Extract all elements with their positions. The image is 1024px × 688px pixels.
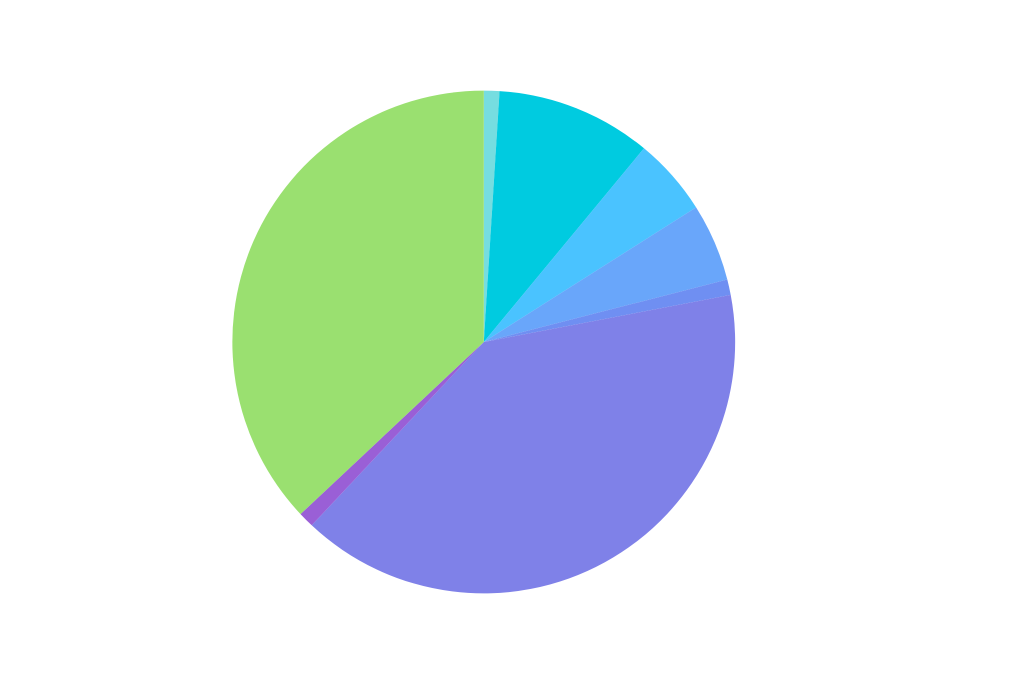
slice: sky blue [484,148,696,342]
slice: light teal [484,91,500,342]
slice: large periwinkle [312,295,735,593]
slice: green [232,91,484,514]
slice: periwinkle small [484,280,731,342]
slice: purple [300,342,484,525]
slice: blue [484,207,727,342]
slice: cyan [484,91,644,342]
